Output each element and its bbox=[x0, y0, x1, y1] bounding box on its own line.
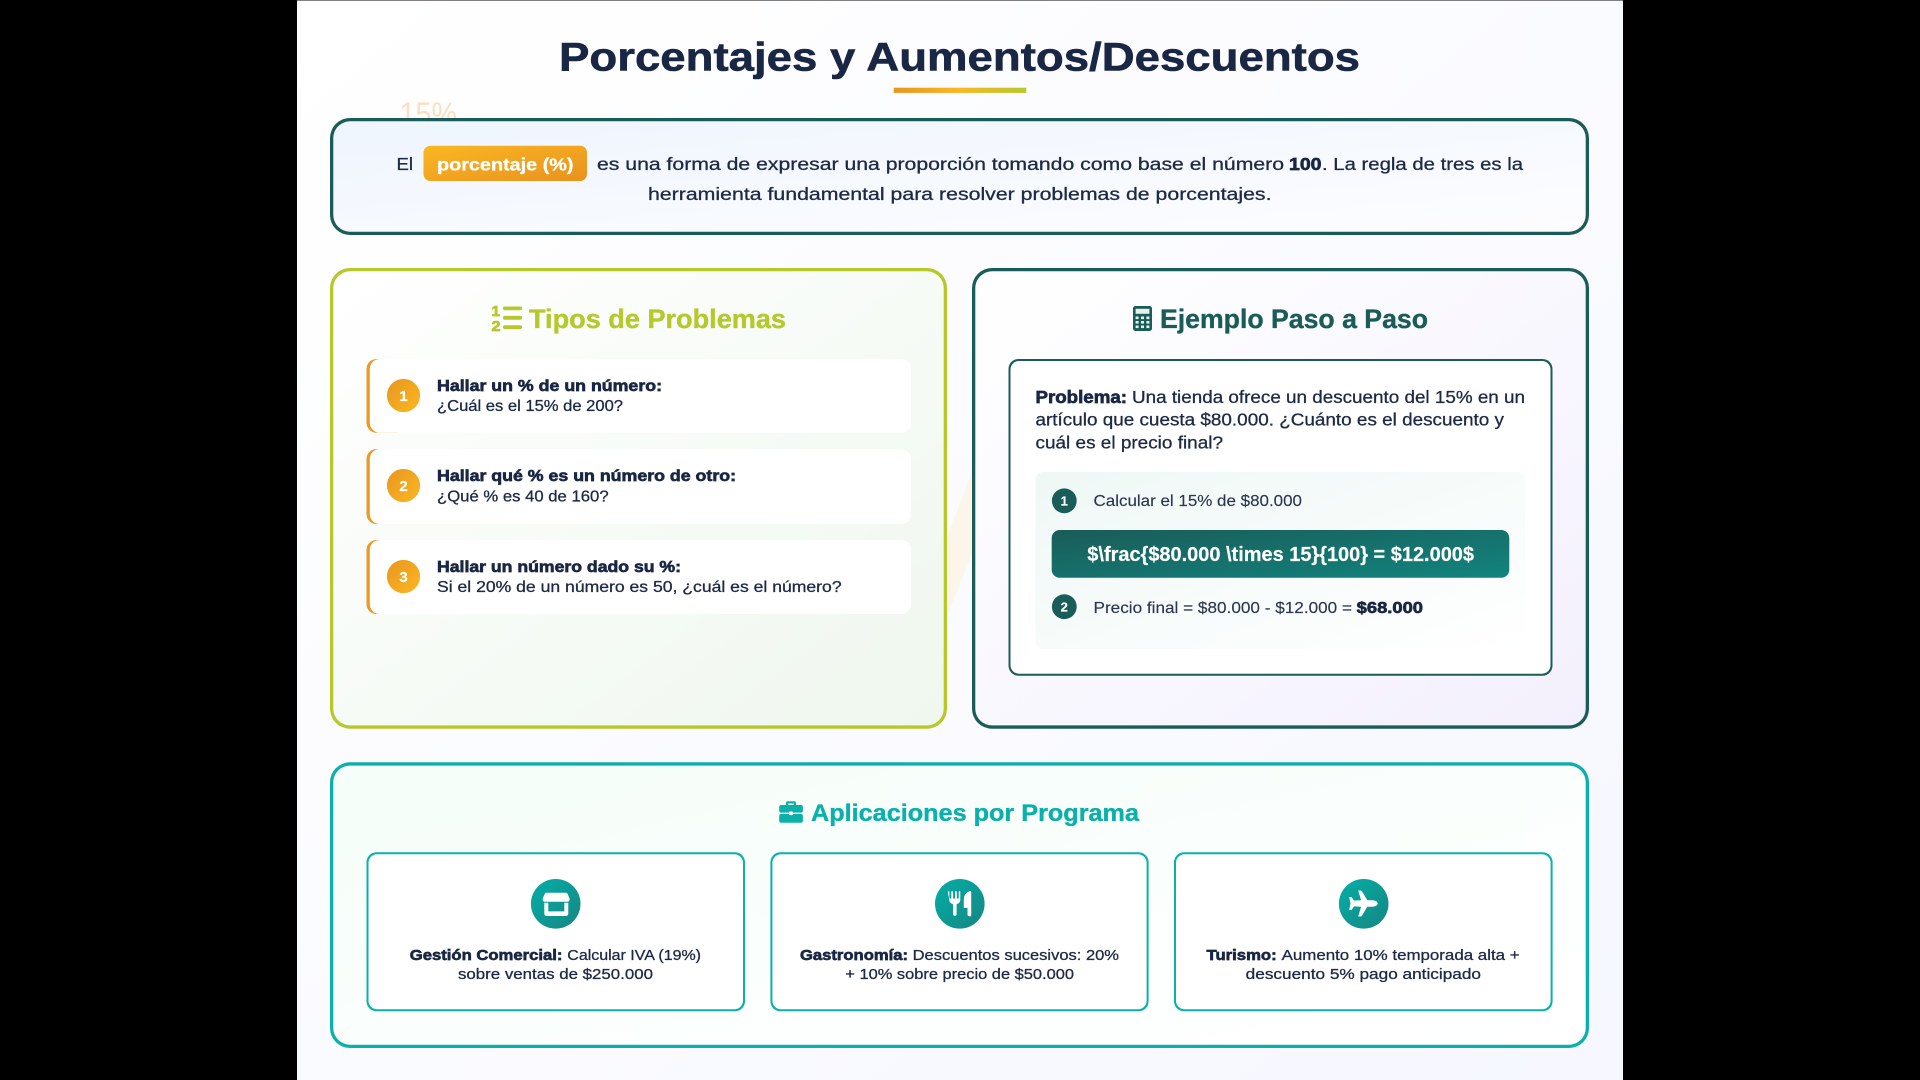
problem statement: Problema: bbox=[1036, 387, 1127, 407]
heading: ejemplo paso a paso: Ejemplo Paso a Paso bbox=[1160, 304, 1428, 334]
decorative ghost 15%: 15% bbox=[400, 96, 457, 132]
panel: definition: 100 bbox=[1289, 154, 1322, 174]
heading: aplicaciones por programa: Aplicaciones por Programa bbox=[811, 800, 1140, 827]
solution steps bbox=[1036, 472, 1525, 649]
icon: plane bbox=[1339, 879, 1388, 929]
card: gestión comercial bbox=[366, 852, 745, 1011]
solution steps: $68.000 bbox=[1357, 600, 1423, 617]
card: turismo bbox=[1174, 852, 1553, 1011]
card: turismo: Aumento 10% temporada alta + bbox=[1282, 947, 1520, 964]
solution steps: $\frac{$80.000 \times 15}{100} = $12.000$ bbox=[1087, 544, 1474, 566]
problem type 2: Hallar qué % es un número de otro: bbox=[437, 468, 736, 485]
problem type 1: ¿Cuál es el 15% de 200? bbox=[437, 398, 623, 415]
card: gestión comercial: sobre ventas de $250.000 bbox=[458, 966, 653, 983]
problem statement bbox=[1036, 387, 1525, 452]
problem type 3: 3 bbox=[399, 569, 408, 586]
card: gastronomía bbox=[770, 852, 1149, 1011]
panel: definition: El bbox=[396, 154, 413, 174]
solution steps: 1 bbox=[1061, 494, 1068, 508]
problem type 3: Hallar un número dado su %: bbox=[437, 559, 681, 576]
decorative ghost shape bbox=[947, 472, 972, 617]
card: turismo: Turismo: bbox=[1206, 947, 1277, 964]
card: gestión comercial: Gestión Comercial: bbox=[410, 947, 562, 964]
icon: numbered list: 2 bbox=[492, 318, 500, 335]
panel: ejemplo paso a paso bbox=[972, 268, 1589, 729]
example card bbox=[1008, 359, 1552, 676]
problem type 2: 2 bbox=[399, 478, 408, 495]
problem type 1: Hallar un % de un número: bbox=[437, 378, 662, 395]
problem type 1: 1 bbox=[399, 388, 408, 405]
card: turismo: descuento 5% pago anticipado bbox=[1246, 966, 1481, 983]
panel: definition: herramienta fundamental para resolver problemas de porcentajes. bbox=[648, 184, 1272, 204]
panel: tipos de problemas bbox=[330, 268, 947, 729]
problem type 2 bbox=[366, 449, 911, 524]
problem statement: artículo que cuesta $80.000. ¿Cuánto es el descuento y bbox=[1036, 410, 1504, 430]
card: gastronomía: + 10% sobre precio de $50.000 bbox=[845, 966, 1074, 983]
icon: utensils bbox=[935, 879, 985, 929]
panel: aplicaciones por programa bbox=[330, 762, 1589, 1048]
panel: definition bbox=[330, 118, 1589, 235]
problem type 1 bbox=[366, 359, 911, 433]
solution steps: Calcular el 15% de $80.000 bbox=[1094, 493, 1302, 510]
icon: numbered list bbox=[492, 303, 522, 335]
problem type 3 bbox=[366, 540, 911, 614]
problem type 3: Si el 20% de un número es 50, ¿cuál es el número? bbox=[437, 579, 842, 596]
card: gastronomía: Descuentos sucesivos: 20% bbox=[913, 947, 1119, 964]
icon: briefcase bbox=[779, 801, 803, 823]
panel: definition: . La regla de tres es la bbox=[1322, 154, 1524, 174]
icon: calculator bbox=[1133, 306, 1152, 331]
solution steps: Precio final = $80.000 - $12.000 = bbox=[1094, 600, 1352, 617]
icon: store bbox=[531, 879, 580, 929]
solution steps: 2 bbox=[1061, 599, 1068, 614]
problem type 2: ¿Qué % es 40 de 160? bbox=[437, 488, 609, 506]
card: gastronomía: Gastronomía: bbox=[800, 947, 908, 964]
panel: definition: es una forma de expresar una proporción tomando como base el número bbox=[597, 154, 1284, 174]
heading: tipos de problemas: Tipos de Problemas bbox=[529, 304, 786, 334]
problem statement: cuál es el precio final? bbox=[1036, 432, 1223, 452]
card: gestión comercial: Calcular IVA (19%) bbox=[567, 947, 701, 964]
problem statement: Una tienda ofrece un descuento del 15% en un bbox=[1132, 387, 1525, 407]
panel: definition: porcentaje (%) bbox=[437, 155, 574, 175]
page background bbox=[297, 0, 1623, 1080]
icon: numbered list: 1 bbox=[492, 303, 500, 320]
title underline bbox=[894, 88, 1026, 93]
title: Porcentajes y Aumentos/Descuentos bbox=[559, 36, 1360, 80]
